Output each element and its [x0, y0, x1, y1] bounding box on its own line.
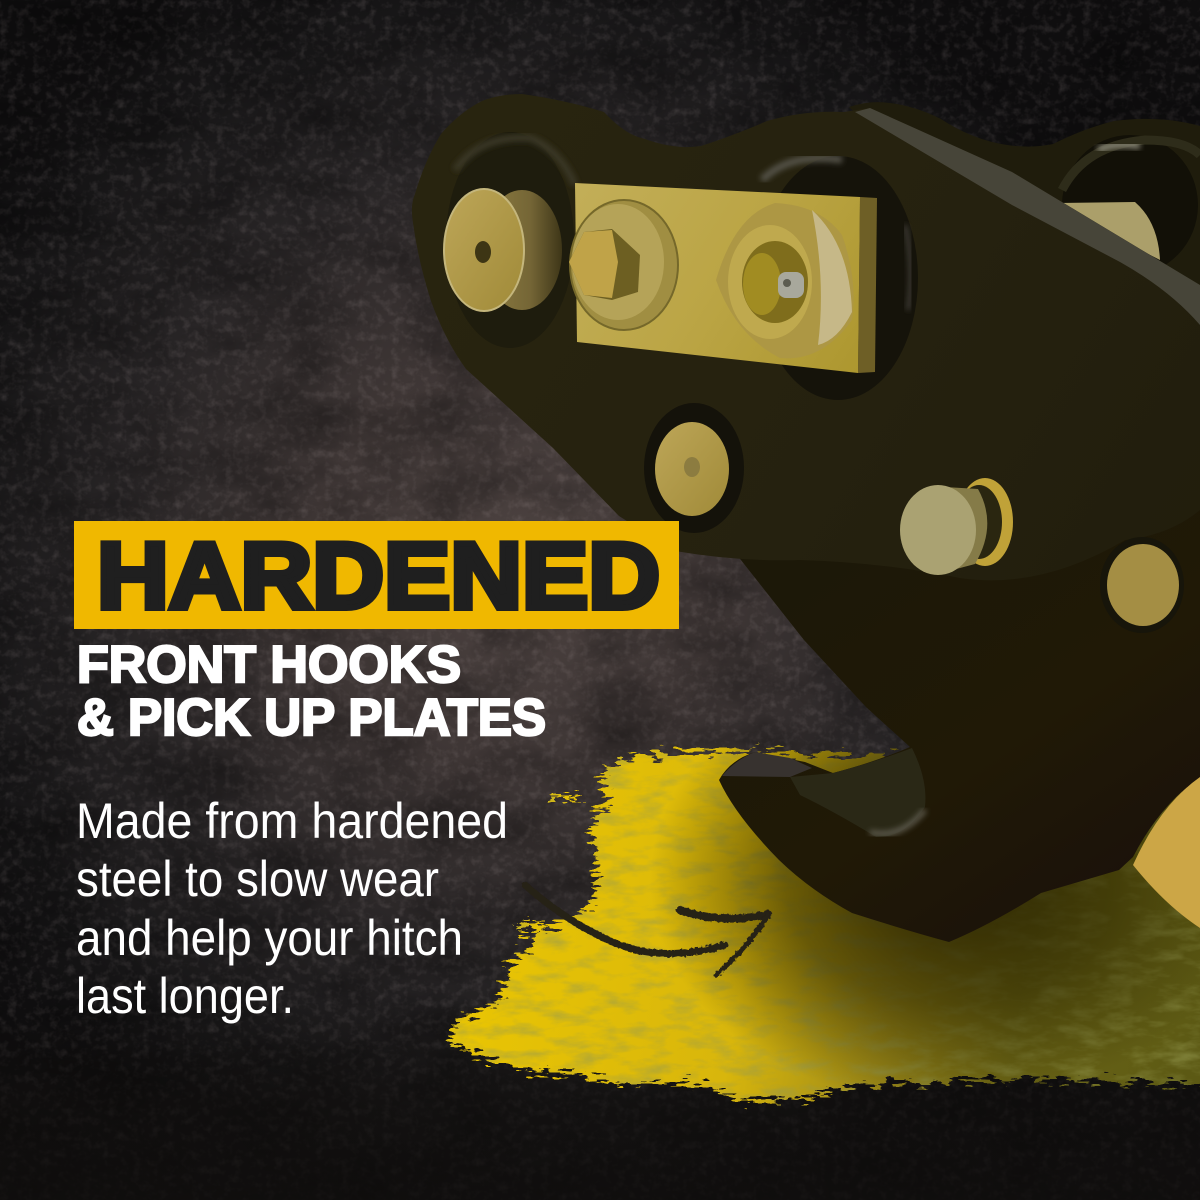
- subheading: [77, 636, 546, 747]
- hook lower plate: [719, 500, 1200, 942]
- centre bottom pin: [644, 403, 744, 533]
- left pin: [444, 189, 562, 311]
- protruding right pin: [900, 478, 1013, 575]
- subheading: & PICK UP PLATES: [77, 689, 546, 747]
- hex bolt: [569, 229, 640, 300]
- plate recess: [758, 156, 918, 400]
- hook tip top face: [722, 752, 812, 777]
- body copy: Made from hardened: [76, 793, 508, 849]
- heading badge: HARDENED: HARDENED: [97, 523, 660, 628]
- body copy: [76, 793, 508, 1024]
- hitch photo: quick hitch assembly: [412, 94, 1200, 942]
- rear side plate: [849, 102, 1200, 320]
- body copy: and help your hitch: [76, 910, 463, 966]
- body copy: last longer.: [76, 968, 294, 1024]
- lower right pin: [1100, 537, 1184, 633]
- yellow paint brush stroke: [446, 742, 1200, 1110]
- yellow hitch body at right edge: [1133, 777, 1200, 928]
- washer: [569, 200, 678, 330]
- subheading: FRONT HOOKS: [77, 636, 461, 694]
- main side plate: [412, 94, 1200, 580]
- rear cross pin: [1058, 202, 1160, 260]
- left pin recess: [444, 132, 575, 348]
- body copy: steel to slow wear: [76, 851, 439, 907]
- gold retaining plate: [569, 183, 877, 373]
- hand-drawn arrow on the paint: [525, 885, 768, 975]
- welded grease boss: [716, 203, 854, 358]
- chamfered top edge: [855, 108, 1200, 325]
